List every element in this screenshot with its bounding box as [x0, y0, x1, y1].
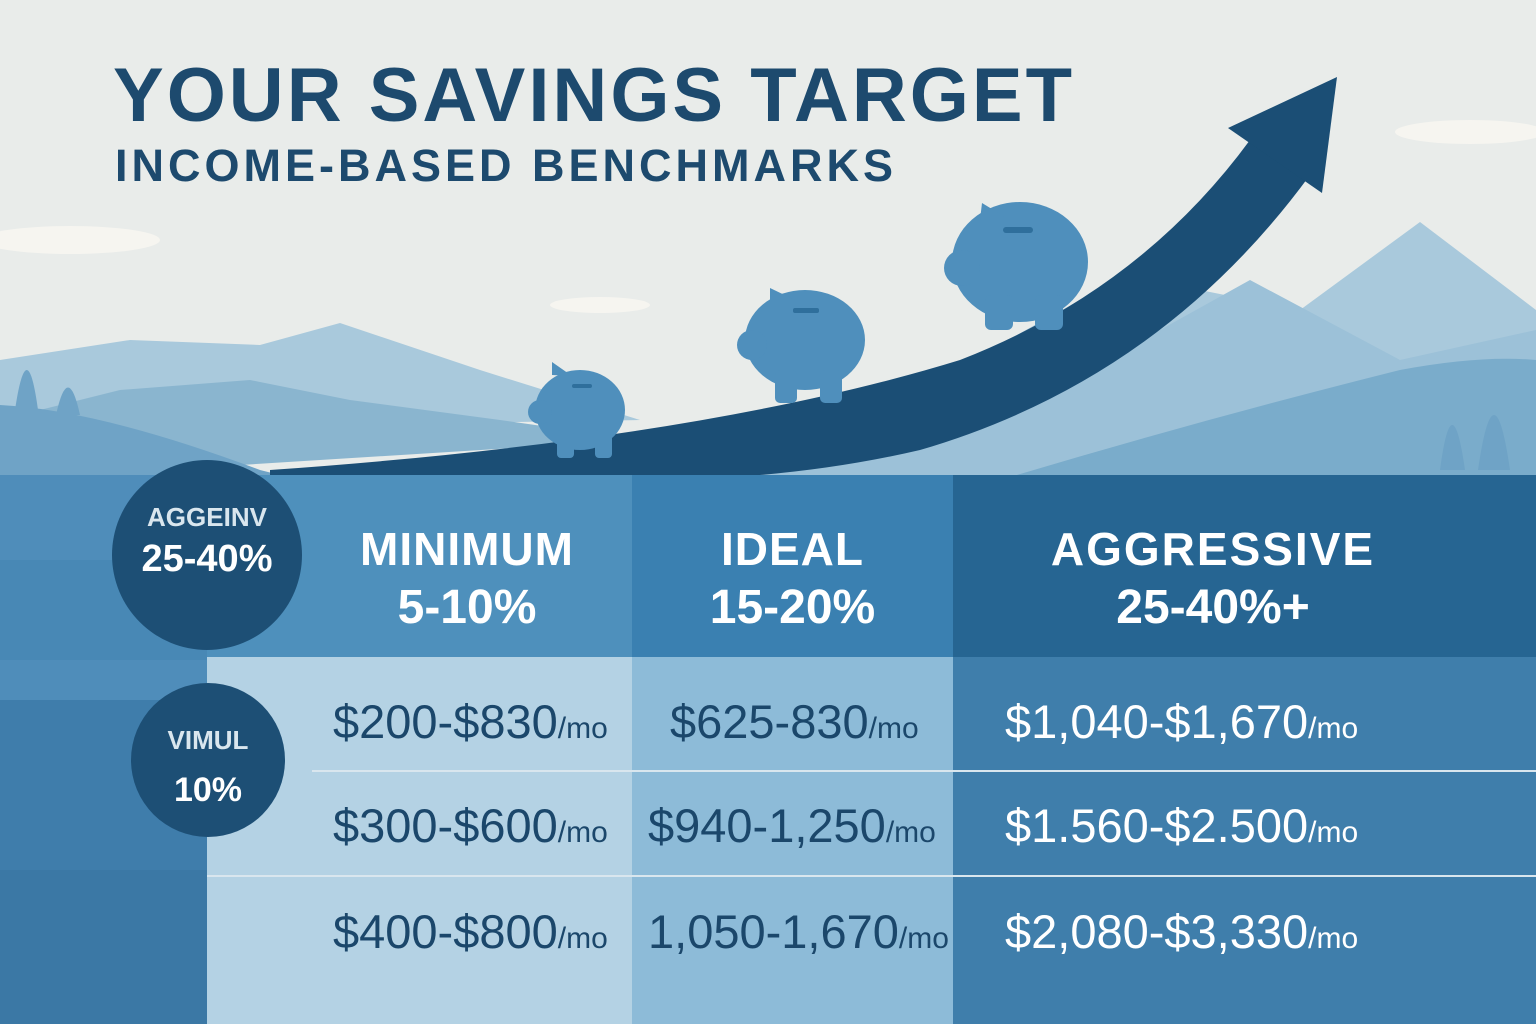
body col 1 — [207, 657, 632, 1024]
body col 3 — [953, 657, 1536, 1024]
row values: $200-$830/mo — [333, 695, 608, 748]
text: $940-1,250/mo — [648, 799, 936, 852]
text: $1,040-$1,670/mo — [1005, 695, 1358, 748]
header labels: MINIMUM — [360, 523, 574, 575]
circle badge 2: 10% — [174, 771, 242, 809]
piggy banks — [528, 202, 1088, 458]
text: $625-830/mo — [670, 695, 919, 748]
text: 1,050-1,670/mo — [648, 905, 949, 958]
arrow — [270, 77, 1337, 475]
text: $2,080-$3,330/mo — [1005, 905, 1358, 958]
circle badge 1 — [112, 460, 302, 650]
text: 25-40%+ — [1116, 581, 1310, 634]
text: $400-$800/mo — [333, 905, 608, 958]
circle badge 2: VIMUL — [168, 725, 248, 755]
text: AGGRESSIVE — [1051, 523, 1375, 575]
circle badge 1: 25-40% — [142, 538, 272, 580]
table — [207, 475, 1536, 1024]
text: IDEAL — [721, 523, 864, 575]
body col 2 — [632, 657, 953, 1024]
text: $1.560-$2.500/mo — [1005, 799, 1358, 852]
text: 5-10% — [398, 581, 536, 634]
subtitle: INCOME-BASED BENCHMARKS — [115, 140, 897, 191]
text: 15-20% — [710, 581, 875, 634]
circle badge 1: AGGEINV — [147, 502, 267, 532]
title: YOUR SAVINGS TARGET — [113, 53, 1075, 138]
header: aggressive — [953, 475, 1536, 657]
text: $300-$600/mo — [333, 799, 608, 852]
header: minimum — [207, 475, 632, 657]
circle badge 2 — [131, 683, 285, 837]
header: ideal — [632, 475, 953, 657]
